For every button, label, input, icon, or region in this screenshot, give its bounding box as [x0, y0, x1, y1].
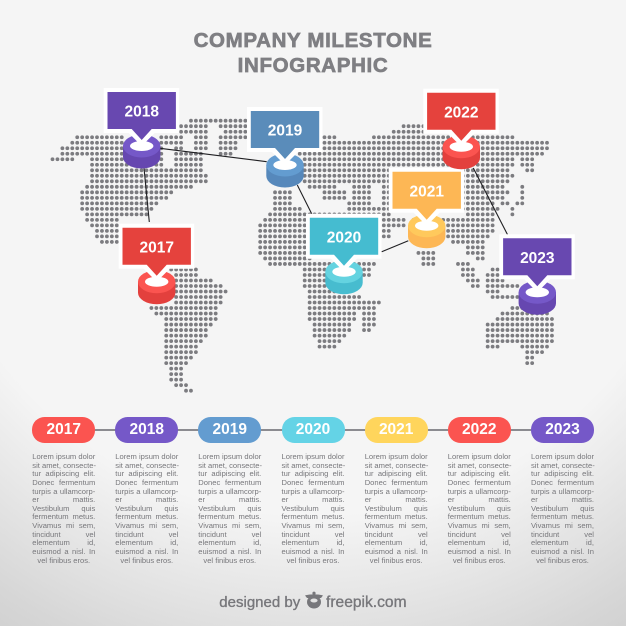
text block 2019: turpis a ullamcorp-: [198, 486, 261, 496]
text block 2017: euismod a nisl. In: [32, 547, 95, 556]
text block 2020: [282, 452, 345, 564]
text block 2018: turpis a ullamcorp-: [115, 486, 178, 496]
marker: 2020: [306, 214, 382, 294]
text block 2020: elementum id,: [282, 538, 344, 547]
timeline pill 2020: 2020: [296, 421, 330, 438]
icon: freepik mascot: [305, 592, 323, 608]
text block 2022: [448, 452, 512, 564]
text block 2023: sit amet, consecte-: [531, 461, 595, 470]
text block 2018: tur adipiscing elit.: [115, 469, 178, 478]
text block 2022: fermentum metus.: [448, 512, 511, 521]
timeline pill 2023: [531, 417, 594, 443]
flag 2017: 2017: [139, 239, 174, 256]
title: INFOGRAPHIC: [238, 54, 388, 77]
timeline pill 2019: [198, 417, 261, 443]
text block 2021: elementum id,: [365, 538, 428, 547]
title: [194, 29, 432, 77]
text block 2019: tur adipiscing elit.: [198, 469, 261, 478]
text block 2023: fermentum metus.: [531, 512, 594, 521]
marker: 2018: [104, 88, 179, 168]
text block 2020: Lorem ipsum dolor: [282, 452, 344, 461]
text block 2019: Donec fermentum: [198, 478, 261, 487]
text block 2023: Lorem ipsum dolor: [531, 452, 594, 461]
text block 2017: vel finibus eros.: [37, 556, 90, 564]
text block 2019: vel finibus eros.: [203, 556, 256, 564]
text block 2020: turpis a ullamcorp-: [282, 486, 344, 496]
text block 2018: sit amet, consecte-: [115, 461, 179, 470]
text block 2017: elementum id,: [32, 538, 95, 547]
text block 2023: [531, 452, 595, 564]
text block 2018: elementum id,: [115, 538, 178, 547]
text block 2017: fermentum metus.: [32, 512, 95, 521]
timeline pill 2021: [365, 417, 428, 443]
text block 2020: er mattis.: [282, 495, 344, 504]
text block 2023: turpis a ullamcorp-: [531, 486, 594, 496]
text block 2023: euismod a nisl. In: [531, 547, 594, 556]
text block 2020: Vestibulum quis: [282, 504, 344, 513]
text block 2022: tur adipiscing elit.: [448, 469, 511, 478]
text block 2017: er mattis.: [32, 495, 95, 504]
text block 2022: Lorem ipsum dolor: [448, 452, 511, 461]
text block 2023: tur adipiscing elit.: [531, 469, 594, 478]
text block 2019: sit amet, consecte-: [198, 461, 262, 470]
text block 2021: turpis a ullamcorp-: [365, 486, 428, 496]
flag 2023: 2023: [520, 250, 555, 267]
text block 2019: euismod a nisl. In: [198, 547, 261, 556]
dotted world map: [52, 121, 552, 391]
timeline pill 2017: [32, 417, 95, 443]
text block 2021: fermentum metus.: [365, 512, 428, 521]
text block 2022: er mattis.: [448, 495, 511, 504]
text block 2018: fermentum metus.: [115, 512, 178, 521]
text block 2022: Vestibulum quis: [448, 504, 511, 513]
footer credit: freepik.com: freepik.com: [326, 594, 407, 611]
text block 2019: Vivamus mi sem,: [198, 521, 261, 530]
text block 2020: tincidunt vel: [282, 530, 344, 539]
text block 2018: Lorem ipsum dolor: [115, 452, 178, 461]
text block 2020: euismod a nisl. In: [282, 547, 344, 556]
text block 2022: elementum id,: [448, 538, 511, 547]
text block 2020: sit amet, consecte-: [282, 461, 345, 470]
text block 2021: er mattis.: [365, 495, 428, 504]
marker: 2022: [423, 89, 499, 169]
text block 2023: er mattis.: [531, 495, 594, 504]
text block 2019: elementum id,: [198, 538, 261, 547]
flag 2020: 2020: [327, 229, 361, 246]
timeline pill 2017: 2017: [47, 421, 81, 438]
text block 2017: tur adipiscing elit.: [32, 469, 95, 478]
text block 2017: Vivamus mi sem,: [32, 521, 95, 530]
text block 2021: [364, 452, 428, 564]
pin 2020: [325, 260, 363, 294]
text block 2022: euismod a nisl. In: [448, 547, 511, 556]
text block 2021: Vivamus mi sem,: [365, 521, 428, 530]
text block 2022: vel finibus eros.: [453, 556, 506, 564]
marker: 2019: [247, 107, 322, 188]
pin 2023: [519, 281, 556, 315]
text block 2021: euismod a nisl. In: [365, 547, 428, 556]
text block 2021: Lorem ipsum dolor: [365, 452, 428, 461]
flag 2022: 2022: [444, 104, 479, 121]
timeline pill 2022: 2022: [462, 421, 497, 438]
timeline line: [95, 429, 531, 430]
text block 2022: sit amet, consecte-: [448, 461, 512, 470]
text block 2019: fermentum metus.: [198, 512, 261, 521]
text block 2023: vel finibus eros.: [536, 556, 589, 564]
timeline pill 2019: 2019: [213, 421, 247, 438]
text block 2017: sit amet, consecte-: [32, 461, 96, 470]
text block 2017: Vestibulum quis: [32, 504, 95, 513]
title: COMPANY MILESTONE: [194, 29, 432, 52]
text block 2018: er mattis.: [115, 495, 178, 504]
text block 2019: Vestibulum quis: [198, 504, 261, 513]
pin 2017: [138, 270, 175, 304]
text block 2020: Donec fermentum: [282, 478, 344, 487]
text block 2017: Donec fermentum: [32, 478, 95, 487]
text block 2019: er mattis.: [198, 495, 261, 504]
connector lines between milestones: [144, 148, 508, 252]
text block 2018: Vivamus mi sem,: [115, 521, 178, 530]
text block 2022: turpis a ullamcorp-: [448, 486, 511, 496]
timeline pill 2020: [282, 417, 344, 443]
marker: 2017: [119, 224, 194, 304]
pin 2019: [266, 154, 304, 188]
text block 2019: Lorem ipsum dolor: [198, 452, 261, 461]
text block 2020: tur adipiscing elit.: [282, 469, 344, 478]
text block 2022: tincidunt vel: [448, 530, 511, 539]
timeline pill 2018: [115, 417, 178, 443]
text block 2018: [115, 452, 179, 564]
pin 2022: [443, 135, 480, 169]
text block 2022: Donec fermentum: [448, 478, 511, 487]
text block 2018: Vestibulum quis: [115, 504, 178, 513]
text block 2017: tincidunt vel: [32, 530, 95, 539]
text block 2018: Donec fermentum: [115, 478, 178, 487]
text block 2018: tincidunt vel: [115, 530, 178, 539]
timeline pill 2022: [448, 417, 511, 443]
text block 2022: Vivamus mi sem,: [448, 521, 511, 530]
text block 2023: Vestibulum quis: [531, 504, 594, 513]
text block 2020: vel finibus eros.: [287, 556, 339, 564]
text block 2020: Vivamus mi sem,: [282, 521, 344, 530]
text block 2018: euismod a nisl. In: [115, 547, 178, 556]
flag 2018: 2018: [124, 104, 159, 121]
text block 2018: vel finibus eros.: [120, 556, 173, 564]
world map with milestones: [50, 88, 574, 393]
flag 2021: 2021: [409, 183, 444, 200]
text block 2021: Donec fermentum: [365, 478, 428, 487]
text block 2021: tincidunt vel: [365, 530, 428, 539]
text block 2017: Lorem ipsum dolor: [32, 452, 95, 461]
timeline pill 2021: 2021: [379, 421, 413, 438]
text block 2023: Vivamus mi sem,: [531, 521, 594, 530]
text block 2019: [198, 452, 262, 564]
text block 2023: Donec fermentum: [531, 478, 594, 487]
text block 2021: Vestibulum quis: [365, 504, 428, 513]
footer credit: designed by: designed by: [219, 594, 300, 611]
text block 2019: tincidunt vel: [198, 530, 261, 539]
marker: 2021: [389, 168, 464, 248]
timeline pill 2018: 2018: [130, 421, 164, 438]
text block 2023: tincidunt vel: [531, 530, 594, 539]
pin 2021: [408, 214, 445, 248]
text block 2021: sit amet, consecte-: [365, 461, 428, 470]
text block 2020: fermentum metus.: [282, 512, 344, 521]
text block 2021: vel finibus eros.: [370, 556, 423, 564]
text block 2023: elementum id,: [531, 538, 594, 547]
text block 2017: turpis a ullamcorp-: [32, 486, 95, 496]
flag 2019: 2019: [268, 123, 303, 140]
marker: 2023: [499, 234, 575, 315]
text block 2017: [32, 452, 96, 564]
text block 2021: tur adipiscing elit.: [365, 469, 428, 478]
timeline pill 2023: 2023: [545, 421, 580, 438]
pin 2018: [123, 134, 160, 168]
